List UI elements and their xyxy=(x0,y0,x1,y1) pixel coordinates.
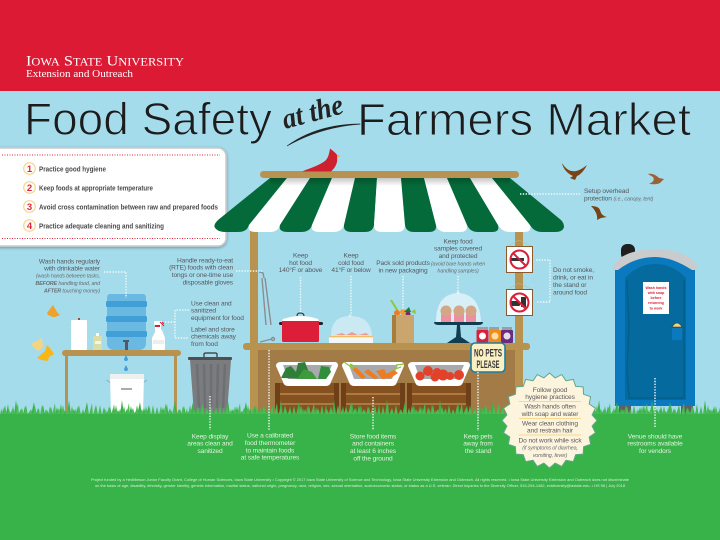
title xyxy=(24,89,692,146)
callout: no smoking or eating: the stand or xyxy=(553,282,587,289)
callout: wash hands: (wash hands between tasks, xyxy=(36,274,100,280)
callout: pets: the stand xyxy=(465,448,492,455)
callout: wash hands: with drinkable water xyxy=(43,266,101,272)
market stand structure xyxy=(243,225,530,415)
icon: paper towel xyxy=(71,318,87,350)
callout: hot food: Keep xyxy=(293,252,308,260)
tray of carrots xyxy=(342,362,404,386)
no pets sign: PLEASE xyxy=(476,359,500,371)
callout: thermometer: to maintain foods xyxy=(246,448,295,454)
callout: display areas xyxy=(187,396,233,455)
restroom sign: before xyxy=(651,296,661,300)
callout: no smoking or eating: around food xyxy=(553,290,587,296)
callout: display areas: areas clean and xyxy=(187,440,233,448)
callout: overhead protection: Setup overhead xyxy=(584,188,629,195)
callout: restrooms: Venue should have xyxy=(628,434,683,440)
icon: butterflies xyxy=(31,305,60,361)
callout: storage height: and containers xyxy=(352,440,395,448)
callout: display areas: Keep display xyxy=(192,434,229,440)
callout: samples: handling samples) xyxy=(437,268,479,274)
callout: equipment and chemicals: chemicals away xyxy=(191,334,237,340)
callout: cold food xyxy=(331,252,371,315)
university logo xyxy=(26,54,185,80)
practice 3 xyxy=(24,201,218,213)
crates with food xyxy=(275,362,471,414)
callout: overhead protection: protection (i.e., canopy, tent) xyxy=(584,196,654,202)
tray of tomatoes xyxy=(408,362,470,386)
awning xyxy=(214,171,564,232)
university logo: Extension and Outreach xyxy=(26,69,133,80)
university logo: IOWA STATE UNIVERSITY xyxy=(26,54,185,70)
callout: storage height xyxy=(350,397,397,462)
callout: hot food: 140°F or above xyxy=(279,266,323,274)
awning top bar xyxy=(260,171,519,178)
callout: packaging xyxy=(376,260,431,310)
panel: four practices xyxy=(0,148,226,246)
restroom sign: Wash hands xyxy=(645,286,667,290)
crate 1 xyxy=(275,383,339,414)
restroom sign xyxy=(643,282,669,314)
practice 3: Avoid cross contamination between raw and prepared foods xyxy=(39,202,218,212)
no pets sign: NO PETS xyxy=(474,348,502,360)
badge: hygiene practices: vomiting, fever) xyxy=(533,453,568,459)
callout: storage height: Store food items xyxy=(350,434,397,440)
icon: water drops xyxy=(124,355,128,371)
callout: no smoking or eating xyxy=(536,260,594,302)
icon: water jug xyxy=(106,294,147,350)
callout: RTE foods xyxy=(169,258,262,286)
callout: display areas: sanitized xyxy=(197,448,223,455)
icon: cardinal xyxy=(302,148,340,172)
icon: soap xyxy=(93,333,102,350)
practice 4 xyxy=(24,220,164,232)
callout: no smoking or eating: Do not smoke, xyxy=(553,267,594,274)
grass xyxy=(0,393,720,540)
icon: tongs xyxy=(259,272,274,342)
callout: samples: (avoid bare hands when xyxy=(431,262,485,268)
crate 3 xyxy=(407,383,471,414)
badge: hygiene practices: Do not work while sick xyxy=(518,438,582,444)
footer credits xyxy=(91,477,629,488)
callout: samples: and protected xyxy=(439,253,478,260)
icon: cupcake stand with dome xyxy=(434,292,483,343)
practice 4: 4 xyxy=(27,221,33,232)
footer credits: on the basis of age, disability, ethnicity, gender identity, genetic information, marital status, national origin, pregnancy, race, religion, sex, sexual orientation, socioeconomic status, or status as a U.S. veteran. Direct inquiries to the Diversity Officer, 515-294-1482, extdiversity@iastate.edu. • HS 96 | July 2018 xyxy=(95,483,625,488)
callout: restrooms xyxy=(627,378,683,455)
restroom sign: returning xyxy=(648,301,664,305)
icon: no food or drink sign xyxy=(506,283,532,316)
callout: restrooms: for vendors xyxy=(639,448,672,455)
callout: cold food: Keep xyxy=(344,252,359,260)
badge: hygiene practices: hygiene practices xyxy=(525,394,576,401)
practice 3: 3 xyxy=(27,202,32,213)
icon: hot food pot xyxy=(279,313,323,342)
practice 2 xyxy=(24,182,153,194)
callout: thermometer: at safe temperatures xyxy=(241,454,300,462)
callout: samples xyxy=(431,238,485,295)
callout: no smoking or eating: drink, or eat in xyxy=(553,274,593,282)
portable restroom xyxy=(613,244,697,416)
no pets sign xyxy=(471,343,505,372)
callout: storage height: at least 6 inches xyxy=(350,448,397,455)
callout: wash hands: AFTER touching money) xyxy=(43,288,100,294)
badge: hygiene practices: Wear clean clothing xyxy=(522,420,578,428)
callout: equipment and chemicals: from food xyxy=(191,341,218,348)
practice 2: 2 xyxy=(27,183,32,194)
badge: hygiene practices: Wash hands often xyxy=(524,404,576,410)
callout: restrooms: restrooms available xyxy=(627,440,683,448)
icon: birds xyxy=(562,163,664,220)
practice 1: 1 xyxy=(27,164,33,175)
title: Food Safety xyxy=(24,94,272,144)
callout: pets xyxy=(463,372,493,455)
badge: hygiene practices: and restrain hair xyxy=(527,428,574,434)
crate 2 xyxy=(341,383,405,414)
hand washing table xyxy=(62,294,181,414)
header band xyxy=(0,0,720,91)
badge: hygiene practices: Follow good xyxy=(533,387,568,394)
icon: trash can xyxy=(188,353,232,414)
icon: packaged produce bag xyxy=(391,300,416,343)
callout: hot food xyxy=(279,252,323,312)
callout: thermometer: Use a calibrated xyxy=(247,432,293,440)
callout: equipment and chemicals: equipment for food xyxy=(191,315,244,322)
practice 4: Practice adequate cleaning and sanitizing xyxy=(39,222,164,230)
practice 2: Keep foods at appropriate temperature xyxy=(39,184,153,192)
callout: cold food: 41°F or below xyxy=(331,266,371,274)
callout: wash hands: BEFORE handling food, and xyxy=(35,281,101,287)
callout: packaging: in new packaging xyxy=(378,268,428,274)
callout: wash hands: Wash hands regularly xyxy=(39,258,101,266)
callout: RTE foods: (RTE) foods with clean xyxy=(169,264,233,272)
callout: cold food: cold food xyxy=(338,260,364,267)
callout: RTE foods: disposable gloves xyxy=(183,280,234,286)
callout: RTE foods: tongs or one-time use xyxy=(172,272,233,279)
icon: no smoking sign xyxy=(506,240,532,272)
callout: equipment and chemicals: Label and store xyxy=(191,326,235,334)
restroom sign: with soap xyxy=(647,291,665,295)
practice 1 xyxy=(24,163,106,175)
callout: hot food: hot food xyxy=(289,260,312,267)
callout: samples: samples covered xyxy=(434,246,482,252)
callout: equipment and chemicals xyxy=(165,300,244,348)
callout: RTE foods: Handle ready-to-eat xyxy=(177,258,233,264)
badge: hygiene practices: (if symptoms of diarrhea, xyxy=(522,446,578,452)
badge: hygiene practices: with soap and water xyxy=(521,411,579,418)
callout: overhead protection xyxy=(520,188,654,202)
callout: thermometer xyxy=(241,350,300,462)
restroom sign: to work xyxy=(650,306,662,310)
callout: thermometer: food thermometer xyxy=(245,440,296,447)
tray of greens xyxy=(276,362,338,386)
callout: equipment and chemicals: Use clean and xyxy=(191,300,232,308)
table xyxy=(62,350,181,414)
callout: pets: Keep pets xyxy=(464,434,493,440)
practice 1: Practice good hygiene xyxy=(39,164,106,174)
callout: pets: away from xyxy=(463,440,493,448)
callout: storage height: off the ground xyxy=(353,456,393,462)
icon: covered cold food xyxy=(329,314,373,343)
cupcakes xyxy=(440,306,476,322)
title script: at the xyxy=(279,89,366,146)
callout: samples: Keep food xyxy=(444,238,473,246)
icon: bucket xyxy=(106,374,147,414)
title script: at the: at the xyxy=(279,89,347,136)
callout: equipment and chemicals: sanitized xyxy=(191,308,216,314)
callout: packaging: Pack sold products xyxy=(376,260,431,267)
footer credits: Project funded by a Hedlibeson Junior Faculty Grant, College of Human Sciences, Iowa State University • Copyright © 2017 Iowa State University of Science and Technology, Iowa State University Extension and Outreach. All rights reserved. • Iowa State University Extension and Outreach does not discriminate xyxy=(91,477,629,482)
callout: wash hands xyxy=(35,258,126,298)
icon: spray bottle xyxy=(152,321,165,350)
badge: hygiene practices xyxy=(502,373,597,468)
icon: jars xyxy=(476,327,513,343)
title: Farmers Market xyxy=(357,94,692,145)
door latch xyxy=(672,323,682,340)
